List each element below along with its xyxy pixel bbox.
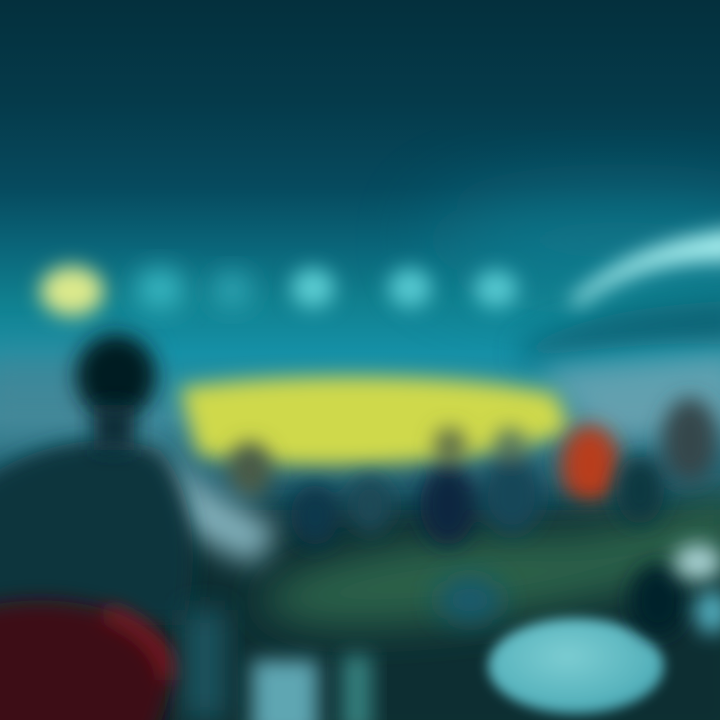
foreground: white plate	[488, 618, 664, 714]
foreground: pale post	[342, 655, 372, 720]
spectator: red highlight	[105, 612, 170, 680]
foreground: dark figure	[630, 564, 686, 636]
figure 6	[662, 398, 718, 482]
spectator: pale arm	[130, 440, 280, 565]
figure 4 head	[434, 428, 466, 462]
light: sweeping arc	[568, 228, 720, 306]
spectator: red jacket	[0, 600, 173, 720]
band: pale haze right	[540, 350, 720, 440]
lower area: dark crowd base	[170, 510, 720, 720]
light: floodlight 2	[136, 269, 184, 309]
figure 5 body	[482, 457, 542, 533]
table: green surface	[260, 490, 720, 627]
flare: orange figure	[561, 425, 619, 505]
figure 1	[228, 442, 272, 498]
pitch: yellow field	[180, 377, 570, 465]
light: floodlight yellow	[40, 266, 104, 316]
spectator: neck	[94, 405, 134, 450]
figure 7	[616, 456, 664, 524]
band: grey haze left	[0, 350, 140, 435]
foreground: pale column	[252, 660, 318, 720]
crowd: silhouettes	[228, 398, 718, 545]
foreground: blue cup	[438, 578, 502, 622]
figure 3	[348, 477, 392, 533]
light: floodlight 5	[388, 268, 432, 308]
light: floodlight 4	[291, 268, 335, 308]
light: floodlight 6	[474, 270, 518, 308]
figure 5 head	[494, 428, 526, 462]
band: dark stand right	[520, 300, 720, 360]
light: floodlight 3	[212, 273, 252, 307]
figure 4 body	[420, 465, 476, 545]
foreground: pale object	[674, 544, 720, 580]
foreground: blue disc	[694, 590, 720, 634]
glow: teal haze on right	[430, 190, 720, 290]
spectator: head	[76, 334, 156, 418]
foreground: teal strip	[185, 610, 225, 720]
spectator: body	[0, 440, 193, 625]
figure 2	[291, 485, 339, 545]
